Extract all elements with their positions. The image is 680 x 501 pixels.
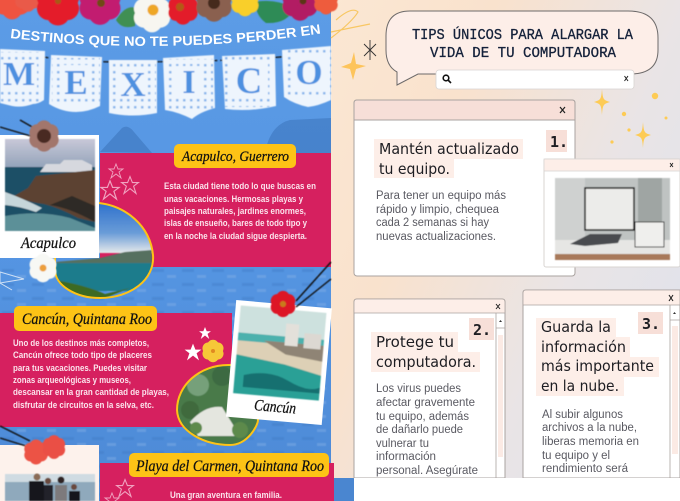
search bar xyxy=(436,70,634,89)
sky and textured blue background xyxy=(0,0,354,501)
pink panel xyxy=(0,313,232,427)
scrollbar xyxy=(496,313,505,478)
body text: afectar gravemente xyxy=(376,397,475,409)
heading xyxy=(536,318,659,396)
title text: TIPS ÚNICOS PARA ALARGAR LA xyxy=(412,26,633,44)
round lagoon photo xyxy=(55,203,155,300)
icon: magnifier xyxy=(443,75,451,83)
icon: close xyxy=(624,76,628,81)
yellow label xyxy=(174,144,296,168)
description: Esta ciudad tiene todo lo que buscas en xyxy=(164,181,316,191)
body text: nuevas actualizaciones. xyxy=(376,231,496,243)
body text xyxy=(376,190,506,243)
number badge xyxy=(546,130,568,152)
icon: gold burst xyxy=(341,52,366,80)
body text: vulnerar tu xyxy=(376,438,429,450)
description: islas de ensueño, bares de todo tipo y xyxy=(164,218,308,228)
icon: paper plane xyxy=(0,272,24,290)
heading: computadora. xyxy=(376,353,476,371)
polaroid: Cancún: Cancún xyxy=(253,397,297,418)
description: zonas arqueológicas y museos, xyxy=(13,375,131,385)
heading: en la nube. xyxy=(541,377,619,395)
body text: Para tener un equipo más xyxy=(376,190,506,202)
right background xyxy=(331,0,680,501)
number badge xyxy=(469,318,494,340)
yellow label: Cancún, Quintana Roo xyxy=(22,311,152,328)
heading: Mantén actualizado xyxy=(379,140,519,158)
small window: desk photo xyxy=(544,159,680,267)
description: paisajes naturales, jardines enormes, xyxy=(164,206,306,216)
number badge: 1. xyxy=(550,133,568,151)
icon: red flower xyxy=(268,262,331,317)
body text xyxy=(376,383,478,477)
body text: liberas memoria en xyxy=(542,436,639,448)
body text: rendimiento será xyxy=(542,463,629,475)
icon: close xyxy=(669,295,673,301)
flower garland xyxy=(0,0,340,32)
polaroid: Acapulco xyxy=(0,135,99,258)
decorative doodles xyxy=(331,10,668,148)
banner letter E: E xyxy=(64,63,88,102)
banner letter C xyxy=(222,54,276,110)
banner letter M: M xyxy=(3,56,35,93)
heading: Guarda la xyxy=(541,318,611,336)
icon: dried pink flower xyxy=(0,120,62,152)
left infographic: destinations in Mexico xyxy=(0,0,354,501)
body text: Al subir algunos xyxy=(542,409,623,421)
description xyxy=(164,181,316,241)
icon: gold scribble xyxy=(331,10,370,38)
body text: archivos a la nube, xyxy=(542,422,637,434)
body text: rápido y limpio, chequea xyxy=(376,204,500,216)
icon: dark asterisk xyxy=(364,40,376,60)
banner letter X xyxy=(109,60,157,116)
polaroid: Cancún xyxy=(226,300,332,425)
heading: Protege tu xyxy=(376,333,454,351)
bottom white band xyxy=(354,478,680,501)
description xyxy=(13,338,169,410)
window 2: protect your computer xyxy=(354,299,505,478)
round garden photo xyxy=(175,363,261,447)
number badge: 2. xyxy=(473,321,491,339)
title text: VIDA DE TU COMPUTADORA xyxy=(430,45,616,62)
yellow label: Playa del Carmen, Quintana Roo xyxy=(135,458,324,475)
speech bubble heading xyxy=(386,11,658,85)
heading xyxy=(371,332,480,372)
description: en la noche la ciudad sigue despierta. xyxy=(164,231,307,241)
yellow label: Acapulco, Guerrero xyxy=(181,149,289,165)
body text: tu equipo y el xyxy=(542,450,610,462)
section: Acapulco xyxy=(0,120,331,300)
banner letter X: X xyxy=(120,65,146,104)
description: Uno de los destinos más completos, xyxy=(13,338,149,348)
yellow label xyxy=(129,453,329,477)
description: Una gran aventura en familia. xyxy=(170,490,282,500)
icon: coral hibiscus xyxy=(0,426,67,464)
description: Cancún ofrece todo tipo de placeres xyxy=(13,350,152,360)
icon: close xyxy=(670,163,673,167)
body text: cada 2 semanas si hay xyxy=(376,217,489,229)
body text xyxy=(542,409,639,475)
hand-drawn stars xyxy=(101,164,138,199)
icon: white flower xyxy=(27,254,59,282)
body text: información xyxy=(376,451,436,463)
banner letter I: I xyxy=(182,64,196,101)
polaroid: Acapulco: Acapulco xyxy=(20,235,76,252)
icon: yellow flower xyxy=(200,340,226,362)
heading xyxy=(374,139,523,178)
body text: de dañarlo puede xyxy=(376,424,463,436)
yellow label xyxy=(14,306,157,331)
window 1: keep your equipment updated xyxy=(354,100,575,276)
papel picado banner: MEXICO xyxy=(0,46,331,119)
body text: Los virus puedes xyxy=(376,383,461,395)
scrollbar xyxy=(670,305,680,478)
hand-drawn stars xyxy=(105,480,133,501)
icon: gold sparkles xyxy=(594,89,668,148)
body text: personal. Asegúrate xyxy=(376,465,478,477)
description: descansar en la gran cantidad de playas, xyxy=(13,387,169,397)
polaroid: family xyxy=(0,445,99,501)
pink panel xyxy=(100,153,331,267)
banner letter I xyxy=(163,55,215,119)
number badge xyxy=(638,312,663,334)
description: disfrutar de circuitos en la selva, etc. xyxy=(13,400,154,410)
icon: close xyxy=(560,107,565,113)
banner letter O xyxy=(282,46,331,107)
section: Cancún xyxy=(0,262,332,447)
window 3: save to the cloud xyxy=(523,290,680,478)
banner letter C: C xyxy=(236,61,262,102)
icon: white stars xyxy=(185,327,211,360)
number badge: 3. xyxy=(642,315,660,333)
heading: tu equipo. xyxy=(379,160,450,178)
banner letter O: O xyxy=(295,53,323,92)
banner letter E xyxy=(49,55,102,112)
icon: close xyxy=(496,304,500,309)
photo: monitor and laptop xyxy=(555,178,670,260)
heading: información xyxy=(541,338,626,356)
banner letter M xyxy=(0,49,45,107)
description: unas vacaciones. Hermosas playas y xyxy=(164,194,304,204)
body text: tu equipo, además xyxy=(376,411,469,423)
heading: más importante xyxy=(541,357,654,375)
pink panel xyxy=(100,463,334,501)
section: Playa del Carmen xyxy=(0,426,334,501)
title: DESTINOS QUE NO TE PUEDES PERDER EN xyxy=(11,24,320,48)
description: para tus vacaciones. Puedes visitar xyxy=(13,363,147,373)
title text xyxy=(412,26,633,62)
